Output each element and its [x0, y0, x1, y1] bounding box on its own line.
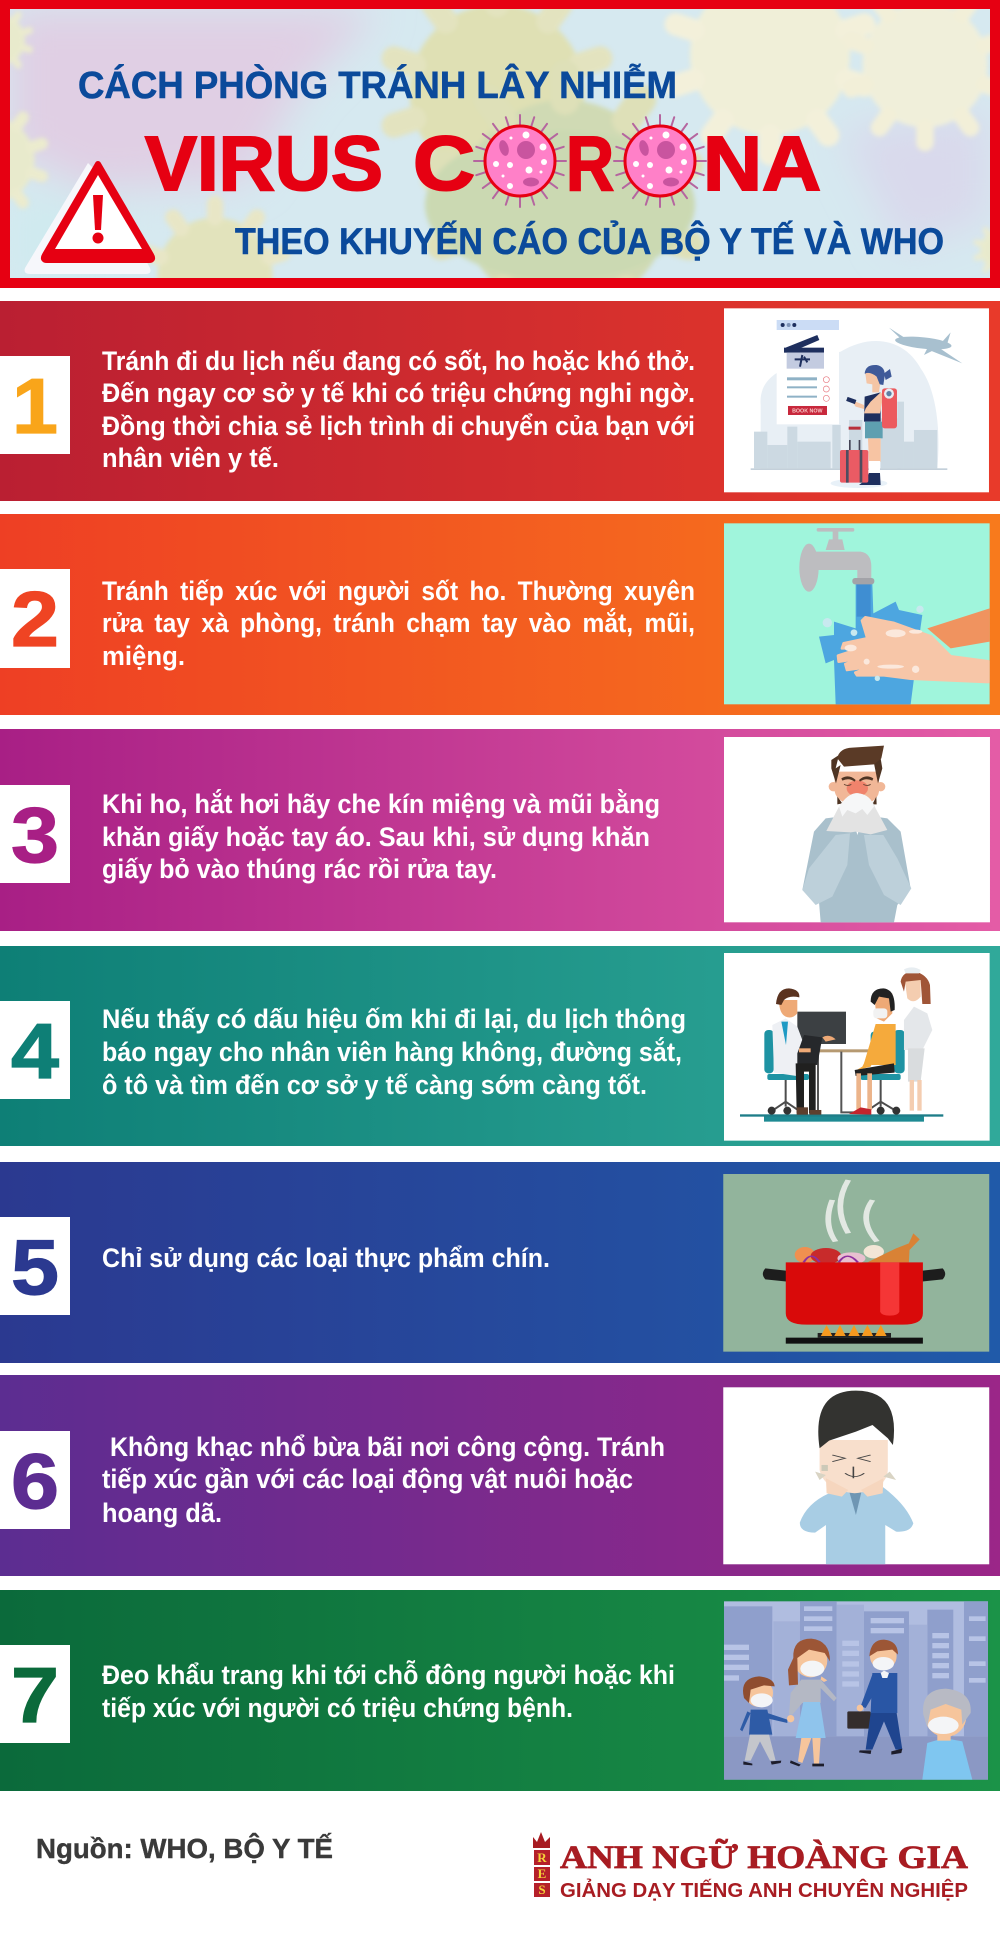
logo RES column: E	[538, 1866, 546, 1881]
header frame	[0, 0, 1000, 288]
step 2 text: rửa tay xà phòng, tránh chạm tay vào mắt, mũi,	[102, 607, 695, 638]
step 1 number badge	[0, 356, 70, 454]
step 6 text: tiếp xúc gần với các loại động vật nuôi hoặc	[102, 1464, 633, 1494]
panel: step 6	[0, 1375, 1000, 1576]
step 6 text	[102, 1432, 665, 1528]
panel: header banner	[0, 0, 1000, 346]
heading: VIRUS CORONA: R	[566, 121, 614, 207]
step 3 text: khăn giấy hoặc tay áo. Sau khi, sử dụng khăn	[102, 822, 650, 852]
icon: virus O left	[474, 115, 566, 207]
step 4 number badge: 4	[11, 1007, 59, 1095]
illustration: doctor, patient and nurse	[724, 953, 990, 1141]
header virus background	[10, 9, 990, 278]
step 3 band	[0, 729, 1000, 931]
step 4 text: báo ngay cho nhân viên hàng không, đường sắt,	[102, 1036, 682, 1067]
step 4 band	[0, 946, 1000, 1146]
logo RES column: S	[538, 1882, 546, 1897]
step 5 band	[0, 1162, 1000, 1363]
step 7 number badge: 7	[11, 1651, 59, 1739]
illustration: traveller with ticket	[724, 308, 989, 492]
panel: step 7	[0, 1590, 1000, 1791]
step 2 number badge: 2	[11, 575, 59, 663]
illustration: cooking pot	[723, 1174, 989, 1352]
illustration: family wearing masks	[724, 1601, 988, 1780]
heading: VIRUS CORONA: O	[630, 121, 690, 207]
step 2 text: Tránh tiếp xúc với người sốt ho. Thường xuyên	[102, 576, 695, 606]
step 1 number badge: 1	[12, 362, 58, 450]
illustration: washing hands	[724, 523, 990, 704]
step 3 number badge	[0, 785, 70, 883]
step 4 text: Nếu thấy có dấu hiệu ốm khi đi lại, du lịch thông	[102, 1004, 686, 1034]
heading: VIRUS CORONA: O	[490, 121, 550, 207]
step 7 band	[0, 1590, 1000, 1791]
logo RES column	[534, 1850, 550, 1897]
heading line 1: CÁCH PHÒNG TRÁNH LÂY NHIỄM	[78, 63, 677, 107]
step 6 text: Không khạc nhổ bừa bãi nơi công cộng. Tránh	[110, 1432, 665, 1462]
logo subtitle: GIẢNG DẠY TIẾNG ANH CHUYÊN NGHIỆP	[560, 1878, 968, 1902]
heading line 3: THEO KHUYẾN CÁO CỦA BỘ Y TẾ VÀ WHO	[235, 220, 944, 262]
step 6 text: hoang dã.	[102, 1498, 222, 1528]
step 1 text: Tránh đi du lịch nếu đang có sốt, ho hoặc khó thở.	[102, 346, 695, 376]
step 7 number badge	[0, 1645, 70, 1743]
icon: virus O right	[614, 115, 706, 207]
step 2 number badge	[0, 569, 70, 668]
step 3 number badge: 3	[11, 791, 59, 879]
illustration: traveller with ticket: BOOK NOW	[792, 408, 824, 414]
step 3 text: giấy bỏ vào thúng rác rồi rửa tay.	[102, 854, 497, 884]
panel: step 1	[0, 301, 1000, 501]
step 2 text	[102, 576, 695, 671]
heading: VIRUS CORONA	[145, 115, 821, 207]
logo: Anh ngữ Hoàng Gia	[533, 1832, 968, 1902]
step 3 text: Khi ho, hắt hơi hãy che kín miệng và mũi bằng	[102, 788, 660, 819]
illustration: person spitting cover mouth	[723, 1387, 989, 1564]
step 2 text: miệng.	[102, 641, 185, 671]
step 4 text: ô tô và tìm đến cơ sở y tế càng sớm càng tốt.	[102, 1070, 647, 1100]
illustration: man sneezing in tissue	[724, 737, 990, 922]
step 1 text: Đến ngay cơ sở y tế khi có triệu chứng nghi ngờ.	[102, 378, 695, 408]
panel: step 2	[0, 514, 1000, 715]
icon: warning triangle	[25, 163, 152, 274]
step 7 text: Đeo khẩu trang khi tới chỗ đông người hoặc khi	[102, 1659, 675, 1690]
logo RES column: R	[537, 1850, 547, 1865]
step 1 band	[0, 301, 1000, 501]
step 5 text: Chỉ sử dụng các loại thực phẩm chín.	[102, 1243, 550, 1273]
heading: VIRUS CORONA: C	[413, 121, 475, 207]
step 6 band	[0, 1375, 1000, 1576]
heading: VIRUS CORONA: NA	[703, 121, 821, 207]
logo title: ANH NGỮ HOÀNG GIA	[560, 1838, 968, 1876]
step 7 text: tiếp xúc với người có triệu chứng bệnh.	[102, 1693, 573, 1723]
step 1 text: nhân viên y tế.	[102, 443, 279, 473]
source note: Nguồn: WHO, BỘ Y TẾ	[36, 1832, 333, 1864]
step 5 number badge	[0, 1217, 70, 1315]
heading: VIRUS CORONA: VIRUS	[145, 121, 383, 207]
step 2 band	[0, 514, 1000, 715]
step 5 number badge: 5	[11, 1223, 59, 1311]
step 1 text: Đồng thời chia sẻ lịch trình di chuyển của bạn với	[102, 411, 695, 441]
panel: step 4	[0, 946, 1000, 1146]
panel: step 3	[0, 729, 1000, 931]
step 6 number badge: 6	[11, 1437, 59, 1525]
step 3 text	[102, 788, 660, 884]
step 1 text	[102, 346, 695, 473]
step 4 number badge	[0, 1001, 70, 1099]
step 7 text	[102, 1659, 675, 1723]
step 4 text	[102, 1004, 686, 1100]
step 6 number badge	[0, 1431, 70, 1529]
logo crown	[533, 1832, 550, 1848]
panel: step 5	[0, 1162, 1000, 1363]
